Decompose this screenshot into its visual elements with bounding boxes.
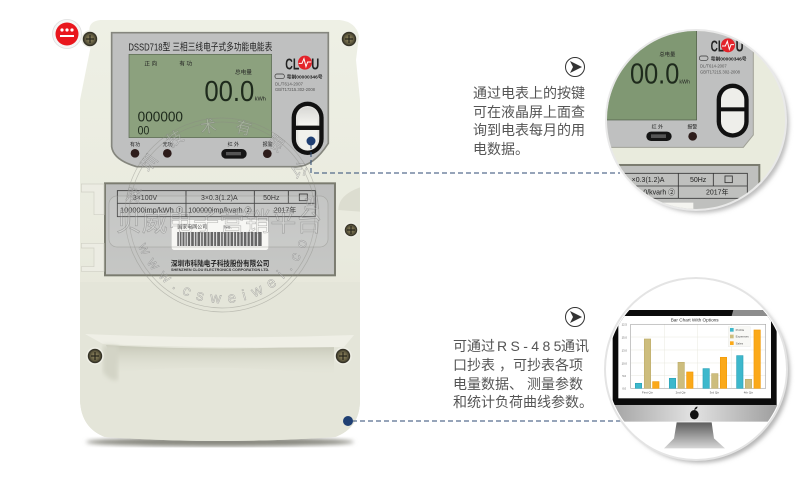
y axis labels: 13.0 (622, 348, 627, 352)
rating values: 100000imp/kvarh ② (188, 207, 252, 215)
certification text: 粤制00000346号 (287, 73, 323, 80)
x axis labels: 2nd Qtr (676, 391, 686, 395)
zoomed logo: CL (711, 39, 724, 56)
certification badge (52, 20, 82, 48)
chart legend: Expenses (736, 335, 749, 339)
zoomed indicators: 红 外 (652, 123, 663, 130)
screws (82, 31, 358, 364)
detail circle: keypad: 00.0 (630, 59, 679, 91)
description: RS-485 (453, 338, 593, 410)
x axis labels (642, 392, 753, 394)
faceplate (112, 33, 328, 167)
faceplate: 无功 (163, 141, 173, 148)
detail circle: keypad: 2017年 (706, 188, 729, 197)
barcode label: No. (224, 225, 232, 231)
y axis labels: 10.0 (622, 361, 627, 365)
detail circle: keypad: 0/kvarh ② (643, 189, 675, 197)
certification text (275, 73, 323, 92)
x axis labels: First Qtr (642, 391, 653, 395)
zoomed buttons (717, 84, 749, 138)
indicator LEDs (131, 149, 272, 159)
rating values: 3×100V (133, 195, 157, 202)
y axis labels (622, 322, 627, 391)
connector: button to detail (311, 144, 620, 173)
meter device (80, 20, 360, 446)
barcode label (172, 220, 268, 250)
bars: profits (635, 356, 743, 388)
detail circle: keypad: ×0.3(1.2)A (632, 177, 665, 184)
description: button query: 可在液晶屏上面查 (473, 104, 585, 120)
detail circle: keypad: 总电量 (659, 50, 676, 58)
LCD screen: kWh (255, 97, 266, 103)
faceplate: 红 外 (228, 141, 239, 148)
connector: port to monitor (352, 420, 622, 422)
zoomed faceplate (607, 31, 754, 148)
rating values (120, 195, 296, 215)
description: RS-485: RS-485 (497, 338, 565, 354)
description: RS-485: 通讯 (561, 338, 589, 354)
arrow icon 1 (566, 58, 584, 76)
right terminal notch (338, 187, 360, 212)
LCD screen (129, 54, 272, 138)
bars: expenses (644, 339, 752, 388)
port marker dot (343, 416, 353, 426)
arrow icon 2 (566, 308, 584, 326)
chart legend: Profits (736, 328, 745, 332)
detail circle: keypad: 报警 (687, 123, 697, 130)
detail circle: keypad: 50Hz (690, 177, 707, 184)
chart grid (631, 324, 766, 388)
LCD screen: 00 (138, 123, 150, 137)
chart card (618, 316, 771, 398)
detail circle: keypad (605, 29, 792, 216)
certification text: GB/T17215.302-2008 (275, 87, 315, 92)
indicator labels: 有功 (130, 141, 140, 148)
meter body (80, 20, 360, 441)
description: RS-485: 、 (509, 376, 523, 392)
detail circle: monitor (604, 277, 790, 463)
query buttons (292, 102, 324, 155)
rating plate (81, 183, 360, 275)
flap recess (85, 334, 354, 380)
certification text: DL/T614-2007 (275, 81, 303, 86)
detail circle: keypad: U (736, 39, 744, 56)
rating values: 2017年 (274, 206, 296, 215)
zoomed LCD (607, 31, 697, 120)
monitor screen (613, 310, 777, 405)
detail circle: keypad: DL/T614-2007 (700, 63, 727, 68)
rating values: 100000imp/kWh ① (120, 207, 183, 215)
chart legend (728, 327, 750, 347)
description: RS-485: 测量参数 (527, 376, 583, 392)
y axis labels: 15.0 (622, 335, 627, 339)
manufacturer name: 深圳市科陆电子科技股份有限公司 (171, 259, 269, 268)
body lower section (80, 282, 360, 441)
rating plate: SHENZHEN CLOU ELECTRONICS CORPORATION LTD. (171, 268, 269, 272)
description: button query: 电数据。 (473, 141, 529, 157)
x axis labels: 4th Qtr (744, 391, 753, 395)
button marker dot (306, 136, 316, 146)
zoomed certification (699, 56, 708, 60)
detail circle: keypad: GB/T17215.302-2008 (700, 69, 740, 74)
x axis labels: 3rd Qtr (710, 391, 719, 395)
description: RS-485: 可通过 (453, 338, 495, 354)
monitor chassis (607, 405, 780, 422)
faceplate: 报警 (263, 141, 273, 148)
screw slots (86, 35, 355, 360)
CLOU logo: U (311, 56, 319, 73)
rating values: 50Hz (263, 195, 280, 202)
watermark arc text: 深圳技术有限公司 (126, 118, 318, 210)
bars: sales (653, 330, 760, 388)
detail circle: keypad: 粤制00000346号 (711, 55, 747, 62)
chart legend: Sales (736, 341, 744, 345)
detail circle: keypad: kWh (679, 79, 690, 85)
y axis labels: 12.5 (622, 322, 627, 326)
model title: DSSD718型 三相三线电子式多功能电能表 (128, 41, 272, 54)
LCD main reading: 00.0 (204, 76, 254, 108)
LCD screen: 有 功 (179, 59, 193, 67)
terminal clips (81, 184, 104, 271)
barcode label: 国家电网公司 (177, 224, 207, 231)
chart title: Bar Chart With Options (671, 318, 719, 323)
rating table (117, 191, 315, 217)
apple logo (690, 407, 699, 419)
description: button query: 询到电表每月的用 (473, 122, 585, 138)
watermark stamp (108, 118, 328, 312)
description: RS-485: 口抄表 (453, 357, 495, 373)
LCD small digits: 000000 (138, 110, 183, 126)
description: RS-485: 和统计负荷曲线参数。 (453, 394, 593, 410)
y axis labels: 5.0 (622, 374, 627, 378)
y axis labels: 0.0 (622, 387, 627, 391)
description: button query: 通过电表上的按键 (473, 85, 585, 101)
description: RS-485: ，可抄表各项 (499, 357, 583, 373)
CLOU logo: CL (285, 56, 299, 73)
LCD labels: 正 向 (144, 59, 158, 67)
monitor stand (664, 422, 725, 448)
description: RS-485: 电量数据 (453, 376, 509, 392)
CLOU logo (285, 56, 319, 73)
zoomed rating plate (618, 164, 760, 209)
LCD screen: 总电量 (235, 68, 252, 76)
rating values: 3×0.3(1.2)A (201, 195, 238, 202)
meter shadow (86, 438, 354, 446)
description: button query (473, 85, 585, 157)
watermark banner text: 贝威电子营销平台 (116, 207, 322, 237)
